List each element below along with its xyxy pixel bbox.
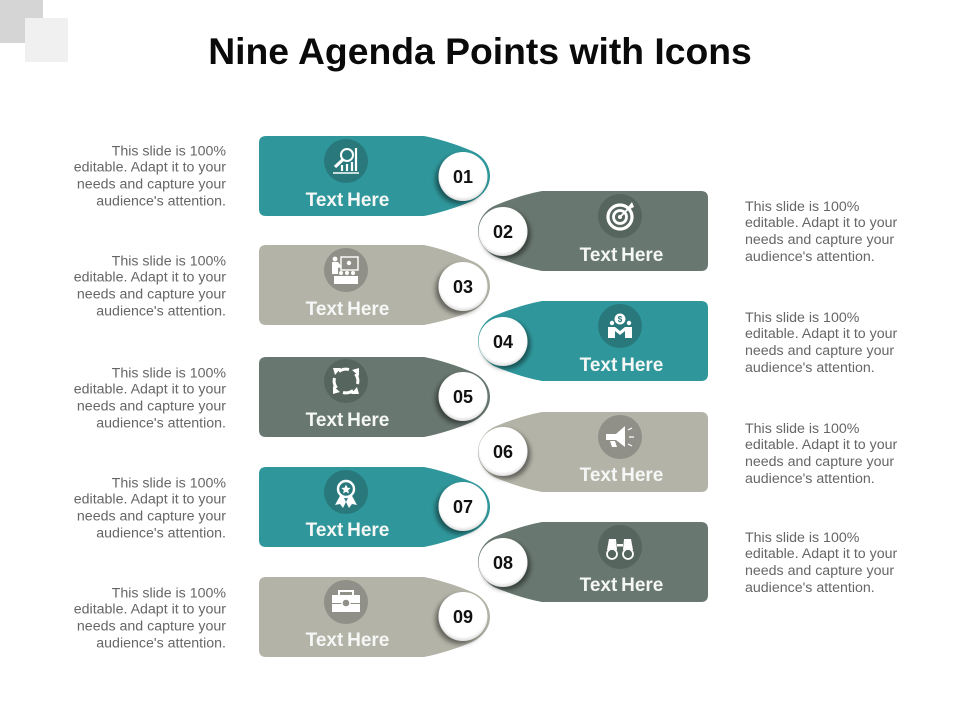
label: Text Here: [306, 630, 389, 651]
panel: agenda point 03: [259, 245, 490, 325]
text block: point 06 description: This slide is 100%: [745, 421, 860, 437]
text block: point 04 description: This slide is 100%: [745, 310, 860, 326]
icon: target: [608, 202, 634, 229]
panel: agenda point 05: [259, 357, 490, 437]
number: 03: [453, 277, 473, 297]
label: Text Here: [580, 355, 663, 376]
text block: point 06 description: audience's attention.: [745, 471, 875, 487]
panel: agenda point 01: [259, 136, 490, 216]
text block: point 04 description: editable. Adapt it to your: [745, 326, 897, 342]
panel: agenda point 09: [259, 577, 490, 657]
label: Text Here: [580, 245, 663, 266]
icon: magnifier chart: [333, 148, 359, 173]
decorative corner squares: [0, 0, 68, 62]
number: 02: [493, 222, 513, 242]
text block: point 05 description: editable. Adapt it to your: [74, 382, 226, 398]
label: Text Here: [306, 520, 389, 541]
icon: handshake with dollar: $: [618, 315, 623, 324]
label: Text Here: [580, 575, 663, 596]
text block: point 07 description: editable. Adapt it to your: [74, 492, 226, 508]
text block: point 05 description: This slide is 100%: [112, 366, 226, 382]
label: Text Here: [306, 410, 389, 431]
text block: point 05 description: needs and capture your: [77, 399, 226, 415]
text block: point 07 description: audience's attention.: [96, 526, 226, 542]
panel: agenda point 02: [478, 191, 708, 271]
text block: point 03 description: audience's attention.: [96, 304, 226, 320]
text block: point 09 description: audience's attention.: [96, 636, 226, 652]
text block: point 07 description: This slide is 100%: [112, 476, 226, 492]
panel: agenda point 04: [478, 301, 708, 381]
panel: agenda point 08: [478, 522, 708, 602]
icon: presenter at board: [332, 257, 358, 284]
text block: point 02 description: This slide is 100%: [745, 199, 860, 215]
text block: point 01 description: This slide is 100%: [112, 144, 226, 160]
text block: point 05 description: audience's attention.: [96, 416, 226, 432]
text block: point 08 description: editable. Adapt it to your: [745, 546, 897, 562]
text block: point 08 description: needs and capture your: [745, 563, 894, 579]
text block: point 03 description: needs and capture your: [77, 287, 226, 303]
label: Text Here: [580, 465, 663, 486]
panel: agenda point 06: [478, 412, 708, 492]
label: Text Here: [306, 190, 389, 211]
text block: point 02 description: needs and capture your: [745, 232, 894, 248]
text block: point 03 description: editable. Adapt it to your: [74, 270, 226, 286]
number: 01: [453, 167, 473, 187]
icon: binoculars: [607, 539, 633, 559]
text block: point 04 description: audience's attention.: [745, 360, 875, 376]
text block: point 02 description: editable. Adapt it to your: [745, 215, 897, 231]
icon: cycle arrows: [333, 368, 359, 394]
text block: point 09 description: needs and capture your: [77, 619, 226, 635]
number: 07: [453, 497, 473, 517]
text block: point 02 description: audience's attention.: [745, 249, 875, 265]
text block: point 08 description: audience's attention.: [745, 580, 875, 596]
text block: point 01 description: audience's attention.: [96, 194, 226, 210]
title: Nine Agenda Points with Icons: [208, 30, 752, 72]
number: 06: [493, 442, 513, 462]
panel: agenda point 07: [259, 467, 490, 547]
text block: point 06 description: editable. Adapt it to your: [745, 437, 897, 453]
icon: toolbox: [332, 591, 360, 612]
label: Text Here: [306, 299, 389, 320]
text block: point 01 description: editable. Adapt it to your: [74, 160, 226, 176]
text block: point 03 description: This slide is 100%: [112, 254, 226, 270]
number: 09: [453, 607, 473, 627]
text block: point 09 description: editable. Adapt it to your: [74, 602, 226, 618]
number: 05: [453, 387, 473, 407]
text block: point 09 description: This slide is 100%: [112, 586, 226, 602]
icon: award ribbon: [335, 481, 357, 508]
icon: megaphone: [606, 426, 634, 447]
text block: point 06 description: needs and capture your: [745, 454, 894, 470]
icon: handshake with dollar: [608, 314, 632, 338]
text block: point 07 description: needs and capture your: [77, 509, 226, 525]
number: 08: [493, 553, 513, 573]
text block: point 01 description: needs and capture your: [77, 177, 226, 193]
text block: point 04 description: needs and capture your: [745, 343, 894, 359]
text block: point 08 description: This slide is 100%: [745, 530, 860, 546]
number: 04: [493, 332, 513, 352]
